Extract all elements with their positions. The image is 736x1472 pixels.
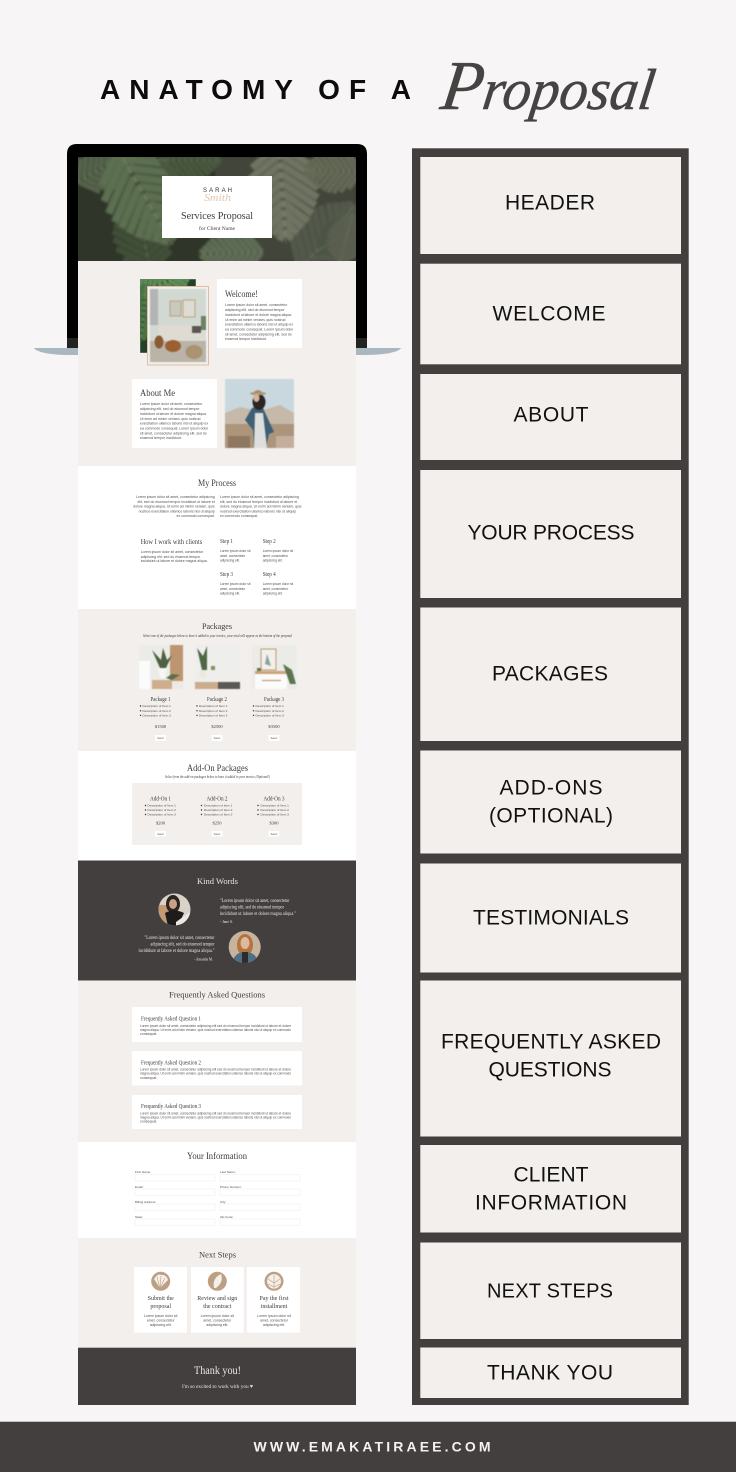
package 2 details: Description of Item 2 [199, 709, 228, 713]
label: add-ons optional [420, 750, 681, 854]
add-on 1: Select [157, 833, 164, 836]
process intro left column: elit, sed do eiusmod tempor incididunt ut labore et [137, 500, 215, 504]
FAQ card 1: Lorem ipsum dolor sit amet, consectetur adipiscing elit sed do eiusmod tempor incididunt ut labore et dolore [140, 1024, 291, 1028]
section: next steps [78, 1238, 356, 1348]
next step card 3: Pay the first [260, 1295, 289, 1302]
how I work with clients: incididunt ut labore et dolore magna aliqua. [141, 559, 208, 563]
step 3: adipiscing elit. [220, 592, 240, 596]
next step card 1: Lorem ipsum dolor sit [144, 1314, 177, 1318]
about paragraph: Ut enim ad minim veniam, quis nostrud [140, 417, 201, 421]
FAQ card 2: magna aliqua. Ut enim ad minim veniam, quis nostrud exercitation ullamco laboris nisi ut aliquip ex commodo [140, 1072, 291, 1076]
title: anatomy of a: ANATOMY OF A [100, 74, 411, 105]
section: my process: My Process [198, 479, 236, 489]
section: kind words testimonials: Kind Words [197, 876, 238, 886]
logo [203, 188, 232, 204]
form labels: First Name: [135, 1170, 151, 1174]
FAQ card 3: consequat. [140, 1120, 157, 1124]
welcome paragraph: sit amet, consectetur adipiscing elit, sed do [225, 332, 292, 336]
package 3 details: $3500 [268, 724, 280, 729]
step 1 [220, 539, 251, 562]
welcome card: Welcome! [225, 289, 258, 299]
FAQ card 3: magna aliqua. Ut enim ad minim veniam, quis nostrud exercitation ullamco laboris nisi ut aliquip ex commodo [140, 1115, 291, 1119]
package 1 details: Description of Item 2 [142, 709, 171, 713]
footer website url: WWW.EMAKATIRAEE.COM [254, 1438, 490, 1454]
step 2: Step 2 [263, 539, 276, 545]
label: frequently asked questions: QUESTIONS [488, 1058, 612, 1082]
package 2 details [196, 697, 228, 741]
label: client information: CLIENT [514, 1164, 589, 1186]
add-on panel [132, 783, 302, 845]
FAQ card 3: Lorem ipsum dolor sit amet, consectetur adipiscing elit sed do eiusmod tempor incididunt ut labore et dolore [140, 1111, 291, 1115]
about paragraph [140, 402, 209, 440]
package 1 details: Select [157, 737, 164, 740]
step 4: Step 4 [263, 572, 276, 578]
title [100, 47, 661, 125]
label: your process [420, 470, 681, 598]
add-on 2: Select [214, 833, 221, 836]
process intro left column [133, 495, 215, 518]
add-on 1: Description of Item 3 [148, 812, 176, 816]
label: about: ABOUT [514, 404, 589, 426]
about paragraph: ea commodo consequat. Lorem ipsum dolor [140, 426, 209, 430]
add-on 2: $250 [212, 820, 222, 826]
label: welcome: WELCOME [492, 302, 606, 326]
about paragraph: Lorem ipsum dolor sit amet, consectetur [140, 402, 203, 406]
welcome paragraph: eiusmod tempor incididunt. [225, 337, 267, 341]
package 3 details: Package 3 [264, 697, 284, 703]
label: next steps: NEXT STEPS [487, 1280, 613, 1302]
label: thank you: THANK YOU [487, 1362, 613, 1384]
welcome photo collage [140, 279, 209, 366]
section: your information form [78, 1142, 356, 1238]
next step card 2: Review and sign [197, 1296, 237, 1302]
label: testimonials [420, 864, 681, 972]
next step card 3: amet, consectetur [260, 1318, 289, 1322]
package 3 details [253, 697, 284, 741]
testimonial quote 2: incididunt ut labore et dolore magna aliqua." [138, 949, 215, 954]
add-on 3: Select [271, 833, 278, 836]
label: header: HEADER [505, 192, 595, 214]
welcome paragraph: ea commodo consequat. Lorem ipsum dolor [225, 328, 294, 332]
about card: About Me [140, 388, 175, 398]
package 3 photo [252, 645, 296, 689]
process intro left column: nostrud exercitation ullamco laboris nisi ut aliquip [139, 509, 215, 513]
package 2 details: $2500 [211, 724, 223, 729]
label: your process: YOUR PROCESS [468, 522, 634, 544]
label: frequently asked questions: FREQUENTLY ASKED [441, 1030, 661, 1054]
add-on 1: Description of Item 2 [148, 808, 176, 812]
step 4: amet, consectetur [263, 587, 289, 591]
section: packages [78, 609, 356, 751]
about card [132, 379, 217, 448]
add-on 2: Description of Item 1 [204, 804, 233, 808]
process intro right column: ex commodo consequat. [220, 514, 258, 518]
FAQ card 2: Lorem ipsum dolor sit amet, consectetur adipiscing elit sed do eiusmod tempor incididunt ut labore et dolore [140, 1068, 291, 1072]
label: welcome [420, 264, 681, 364]
process intro right column [220, 495, 302, 518]
process intro left column: dolore magna aliqua. Ut enim ad minim veniam, quis [133, 505, 215, 509]
step 4 [263, 572, 293, 596]
add-on 3: Description of Item 2 [260, 808, 289, 812]
process intro right column: elit, sed do eiusmod tempor incididunt ut labore et [220, 500, 297, 504]
welcome paragraph: Lorem ipsum dolor sit amet, consectetur [225, 303, 288, 307]
package 1 details: Description of Item 3 [142, 714, 171, 718]
testimonial quote 1 [220, 899, 296, 924]
add-on 1: Description of Item 1 [148, 804, 176, 808]
next step card 3: installment [261, 1304, 288, 1310]
form labels: Phone Number: [220, 1185, 242, 1189]
laptop base [34, 348, 401, 355]
label: packages: PACKAGES [492, 662, 608, 686]
process intro left column: ex commodo consequat. [177, 514, 215, 518]
step 1: adipiscing elit. [220, 558, 240, 562]
label: about [420, 374, 681, 460]
section: thank you: I'm so excited to work with you ♥ [182, 1384, 253, 1390]
about paragraph: adipiscing elit, sed do eiusmod tempor [140, 407, 200, 411]
label: testimonials: TESTIMONIALS [473, 906, 629, 930]
form labels: City: [220, 1200, 226, 1204]
next step card 3 [247, 1267, 300, 1333]
section: header [78, 157, 356, 261]
package 1 details: Package 1 [150, 697, 170, 703]
add-on 3: $300 [270, 820, 279, 826]
form labels [135, 1170, 242, 1219]
testimonial quote 1: adipiscing elit, sed do eiusmod tempor [220, 906, 284, 910]
label: add-ons optional: ADD-ONS [500, 776, 602, 800]
testimonial quote 1: incididunt ut labore et dolore magna aliqua." [220, 912, 296, 917]
step 4: Lorem ipsum dolor sit [263, 582, 293, 586]
label: packages [420, 608, 681, 741]
step 3: Step 3 [220, 572, 233, 578]
welcome paragraph: exercitation ullamco laboris nisi ut aliquip ex [225, 322, 293, 326]
label: header [420, 157, 681, 254]
add-on 3: Add-On 3 [264, 796, 284, 802]
FAQ card 2: Frequently Asked Question 2 [141, 1060, 201, 1066]
step 1: amet, consectetur [220, 554, 246, 558]
about paragraph: incididunt ut labore et dolore magna aliqua. [140, 412, 207, 416]
FAQ card 2 [132, 1051, 302, 1086]
testimonial quote 2: - Amanda M. [194, 958, 213, 962]
process intro right column: Lorem ipsum dolor sit amet, consectetur adipiscing [220, 495, 299, 499]
package 3 details: Description of Item 1 [256, 704, 284, 708]
add-on 2: Add-On 2 [206, 796, 228, 802]
package 1 details [140, 697, 171, 741]
step 1: Lorem ipsum dolor sit [220, 549, 251, 553]
process intro right column: nostrud exercitation ullamco laboris nisi ut aliquip [220, 509, 296, 513]
section: add-on packages: Select from the add-on packages below to have it added to your invoice (Optional!) [165, 775, 271, 779]
section: kind words testimonials [78, 860, 356, 980]
FAQ card 1: magna aliqua. Ut enim ad minim veniam, quis nostrud exercitation ullamco laboris nisi ut aliquip ex commodo [140, 1028, 291, 1032]
add-on 1: Add-On 1 [150, 796, 171, 802]
proposal page mockup [78, 157, 356, 1405]
section: your information form: Your Information [187, 1151, 247, 1161]
next step card 1: proposal [150, 1304, 171, 1310]
how I work with clients: How I work with clients [141, 537, 202, 546]
add-on 2: Description of Item 2 [204, 808, 233, 812]
FAQ card 1 [132, 1007, 302, 1042]
FAQ card 3 [132, 1095, 302, 1129]
next step card 1: amet, consectetur [147, 1318, 175, 1322]
package 1 details: Description of Item 1 [142, 704, 171, 708]
how I work with clients: adipiscing elit, sed do eiusmod tempor [141, 555, 201, 559]
FAQ card 2: consequat. [140, 1076, 157, 1080]
next step card 3: adipiscing elit. [263, 1323, 285, 1327]
section: add-on packages [78, 751, 356, 861]
logo: Smith [204, 192, 232, 204]
section: add-on packages: Add-On Packages [187, 764, 248, 774]
anatomy labels column [412, 148, 689, 1405]
label: add-ons optional: (OPTIONAL) [489, 804, 613, 828]
package 1 photo [139, 645, 183, 689]
about paragraph: sit amet, consectetur adipiscing elit, sed do [140, 432, 207, 436]
title: script word proposal: Proposal [436, 47, 661, 125]
testimonial quote 2: adipiscing elit, sed do eiusmod tempor [150, 942, 215, 948]
add-on 2 [201, 796, 233, 836]
next step card 2: adipiscing elit. [206, 1323, 228, 1327]
welcome card [217, 279, 302, 348]
package 2 details: Description of Item 1 [199, 704, 228, 708]
label: client information: INFORMATION [475, 1192, 627, 1214]
testimonial quote 1: - Jane S. [220, 920, 233, 924]
laptop screen frame [67, 144, 367, 348]
label: thank you [420, 1348, 681, 1398]
section: welcome and about [78, 253, 356, 466]
package 3 details: Description of Item 2 [256, 709, 284, 713]
next step card 3: Lorem ipsum dolor sit [257, 1314, 291, 1318]
section: next steps: Next Steps [199, 1250, 236, 1260]
form labels: Last Name: [220, 1170, 236, 1174]
step 2: amet, consectetur [263, 554, 289, 558]
step 2: adipiscing elit. [263, 558, 283, 562]
laptop mockup [34, 144, 401, 355]
testimonial quote 2: "Lorem ipsum dolor sit amet, consectetur [144, 936, 215, 941]
form labels: Email: [135, 1185, 144, 1189]
section: frequently asked questions [78, 980, 356, 1142]
step 4: adipiscing elit. [263, 592, 283, 596]
form labels: Zip Code: [220, 1215, 234, 1219]
welcome paragraph [225, 303, 294, 341]
form labels: State: [135, 1215, 143, 1219]
header title card [162, 176, 272, 238]
testimonial photo 1 [158, 893, 192, 926]
add-on 1: $200 [156, 820, 166, 826]
next step card 2: Lorem ipsum dolor sit [201, 1314, 234, 1318]
welcome paragraph: Ut enim ad minim veniam, quis nostrud [225, 318, 286, 322]
label: next steps [420, 1242, 681, 1339]
column frame [412, 148, 689, 1405]
how I work with clients [141, 537, 208, 563]
next step card 2: amet, consectetur [203, 1318, 232, 1322]
step 2 [263, 539, 293, 562]
testimonial quote 2 [138, 936, 215, 962]
testimonial quote 1: "Lorem ipsum dolor sit amet, consectetur [220, 899, 290, 904]
header title card: for Client Name [199, 225, 236, 232]
next step card 1 [134, 1267, 187, 1333]
how I work with clients: Lorem ipsum dolor sit amet, consectetur [141, 550, 204, 554]
section: thank you [78, 1348, 356, 1405]
add-on 3 [257, 796, 289, 836]
icon: monstera leaf [264, 1272, 284, 1291]
icon: feather leaf [208, 1272, 227, 1291]
package 3 details: Select [271, 737, 278, 740]
footer bar [0, 1422, 736, 1472]
label: frequently asked questions [420, 980, 681, 1136]
form labels: Billing Address: [135, 1200, 156, 1204]
package 2 details: Package 2 [207, 697, 227, 703]
form fields [135, 1174, 300, 1226]
process intro right column: dolore magna aliqua. Ut enim ad minim veniam, quis [220, 505, 302, 509]
step 3: amet, consectetur [220, 587, 246, 591]
step 3: Lorem ipsum dolor sit [220, 582, 251, 586]
testimonial photo 2 [228, 931, 261, 964]
add-on 2: Description of Item 3 [204, 812, 233, 816]
FAQ card 1: Frequently Asked Question 1 [141, 1017, 201, 1023]
add-on 3: Description of Item 3 [260, 812, 289, 816]
welcome paragraph: incididunt ut labore et dolore magna aliqua. [225, 313, 292, 317]
section: thank you: Thank you! [194, 1365, 241, 1377]
add-on 3: Description of Item 1 [260, 804, 289, 808]
step 2: Lorem ipsum dolor sit [263, 549, 293, 553]
process intro left column: Lorem ipsum dolor sit amet, consectetur adipiscing [136, 495, 215, 499]
package 2 details: Description of Item 3 [199, 714, 228, 718]
label: client information [420, 1145, 681, 1232]
section: packages: Select one of the packages below to have it added to your invoice, your total will appear at the bottom of the proposal [143, 634, 292, 639]
about paragraph: exercitation ullamco laboris nisi ut aliquip ex [140, 422, 208, 426]
about photo [225, 379, 294, 448]
package 2 photo [195, 645, 240, 689]
add-on 1 [145, 796, 176, 836]
logo: SARAH [203, 188, 232, 194]
package 3 details: Description of Item 3 [256, 714, 284, 718]
section: packages: Packages [202, 621, 232, 631]
next step card 2 [191, 1267, 244, 1333]
next step card 1: adipiscing elit. [150, 1323, 172, 1327]
about paragraph: eiusmod tempor incididunt. [140, 436, 182, 440]
FAQ card 1: consequat. [140, 1032, 157, 1036]
package 2 details: Select [214, 737, 221, 740]
section: my process [78, 466, 356, 609]
welcome paragraph: adipiscing elit, sed do eiusmod tempor [225, 308, 285, 312]
FAQ card 3: Frequently Asked Question 3 [141, 1104, 201, 1110]
icon: palm leaf [151, 1272, 170, 1291]
step 1: Step 1 [220, 539, 233, 545]
package 1 details: $1500 [155, 724, 167, 729]
next step card 1: Submit the [148, 1296, 174, 1302]
next step card 2: the contract [203, 1304, 232, 1310]
section: frequently asked questions: Frequently Asked Questions [169, 990, 266, 1000]
step 3 [220, 572, 251, 596]
header palm leaf photo [78, 157, 356, 261]
header title card: Services Proposal [181, 210, 253, 222]
